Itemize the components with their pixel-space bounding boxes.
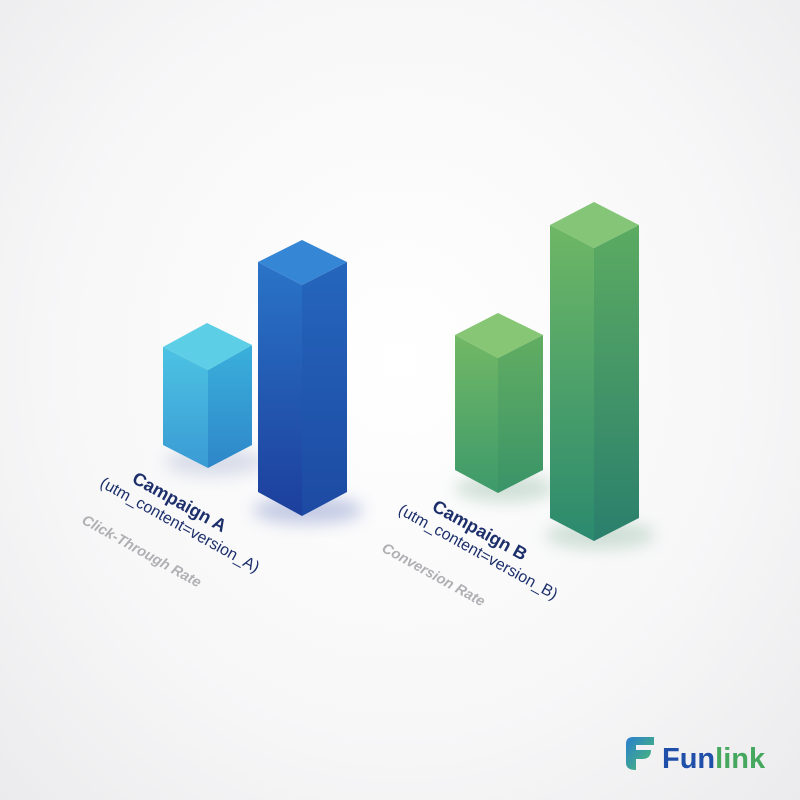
bar: campaign A tall bbox=[253, 240, 363, 524]
label: campaign B: (utm_content=version_B) bbox=[395, 502, 560, 603]
label: campaign A: Click-Through Rate bbox=[79, 512, 204, 591]
logo: Funlink bbox=[626, 737, 766, 775]
label: campaign B bbox=[375, 482, 571, 639]
label: campaign A: Campaign A bbox=[129, 468, 230, 536]
bar: campaign A short bbox=[163, 323, 265, 476]
label: campaign A bbox=[77, 455, 273, 612]
label: campaign B: Campaign B bbox=[429, 496, 531, 564]
label: campaign B: Conversion Rate bbox=[379, 540, 488, 610]
label: campaign A: (utm_content=version_A) bbox=[97, 475, 262, 576]
logo: Funlink: Funlink bbox=[662, 743, 766, 775]
bar: campaign B short bbox=[455, 313, 555, 502]
bar: campaign B tall bbox=[545, 202, 655, 549]
